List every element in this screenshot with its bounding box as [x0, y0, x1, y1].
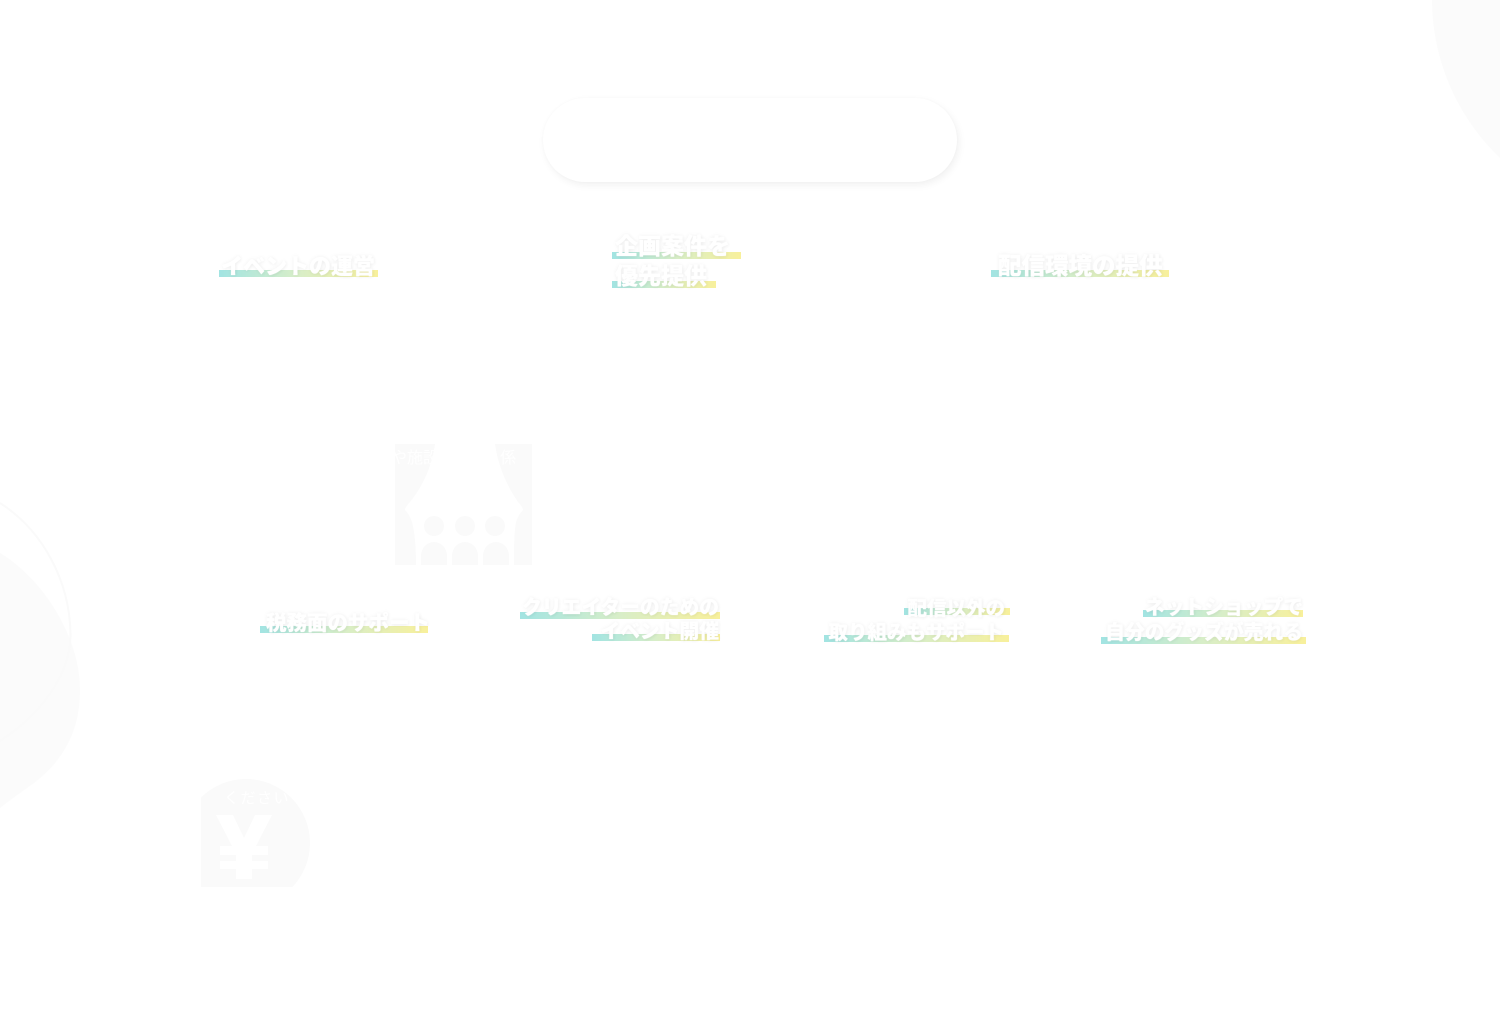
- background blob: left with ring: [0, 490, 100, 820]
- label: priority project offers: 企画案件を: [615, 233, 730, 259]
- label: support beyond streaming: 取り組みもサポート: [828, 622, 1004, 644]
- label: online shop goods: 自分のグッズが売れる: [1105, 622, 1303, 644]
- icon: curtains and audience: 係: [500, 449, 516, 467]
- label: creator events: イベント開催: [600, 621, 719, 643]
- label: online shop goods: [1101, 597, 1306, 644]
- background blob: top right: [1420, 0, 1500, 170]
- title pill: [543, 98, 957, 182]
- label: creator events: [520, 597, 720, 643]
- icon: yen coin: ください: [224, 790, 290, 807]
- label: priority project offers: [612, 233, 741, 289]
- label: support beyond streaming: [824, 598, 1010, 644]
- label: online shop goods: ネットショップで: [1145, 597, 1303, 619]
- label: priority project offers: 優先提供: [615, 263, 707, 289]
- label: support beyond streaming: 配信以外の: [907, 598, 1005, 620]
- icon: yen coin: [201, 776, 313, 887]
- label: creator events: クリエイターのための: [522, 597, 719, 619]
- label: streaming environment: 配信環境の提供: [998, 253, 1162, 279]
- icon: curtains and audience: [394, 444, 532, 565]
- label: event management: イベントの運営: [221, 254, 375, 279]
- label: tax support: 税務面のサポート: [266, 612, 430, 635]
